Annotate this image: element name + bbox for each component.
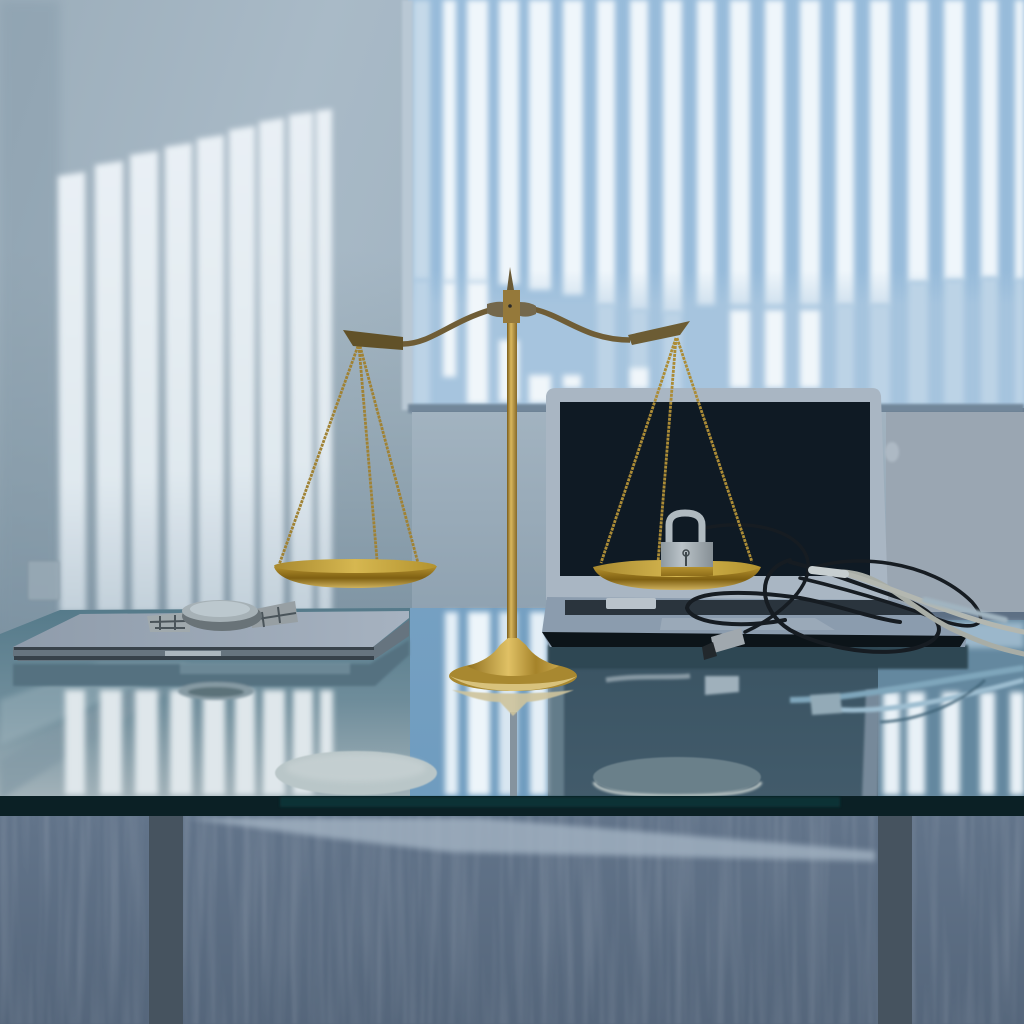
cables xyxy=(687,525,1024,654)
table leg left xyxy=(149,815,183,1024)
left chains xyxy=(279,346,418,572)
light stripes on wall xyxy=(58,109,332,612)
wall socket xyxy=(28,561,59,600)
carpet floor xyxy=(0,815,1024,1024)
right laptop xyxy=(542,388,967,647)
reflection of left pan xyxy=(275,751,437,795)
reflection of right pan xyxy=(593,757,761,797)
beam xyxy=(343,290,690,350)
padlock xyxy=(661,513,713,577)
closed laptop xyxy=(13,611,409,661)
reflection of closed laptop and watch xyxy=(13,640,409,700)
reflection of scale pole xyxy=(510,712,517,796)
table leg right xyxy=(878,815,912,1024)
glass front edge xyxy=(0,796,1024,816)
right pan xyxy=(593,560,761,590)
wristwatch xyxy=(147,600,298,632)
left wall xyxy=(0,0,412,640)
window with vertical blinds xyxy=(402,0,1024,410)
centre pole xyxy=(507,322,517,647)
window sill xyxy=(408,404,1024,413)
lower wall xyxy=(412,412,1024,612)
glass table top xyxy=(0,608,1024,800)
base xyxy=(449,638,577,716)
right chains xyxy=(601,338,752,575)
reflection of right laptop and cables xyxy=(548,645,1024,722)
reflected window stripes xyxy=(65,612,1024,795)
left pan xyxy=(274,559,437,588)
balance scale xyxy=(274,267,761,716)
USB plug xyxy=(702,628,745,660)
pole tip xyxy=(507,267,514,290)
